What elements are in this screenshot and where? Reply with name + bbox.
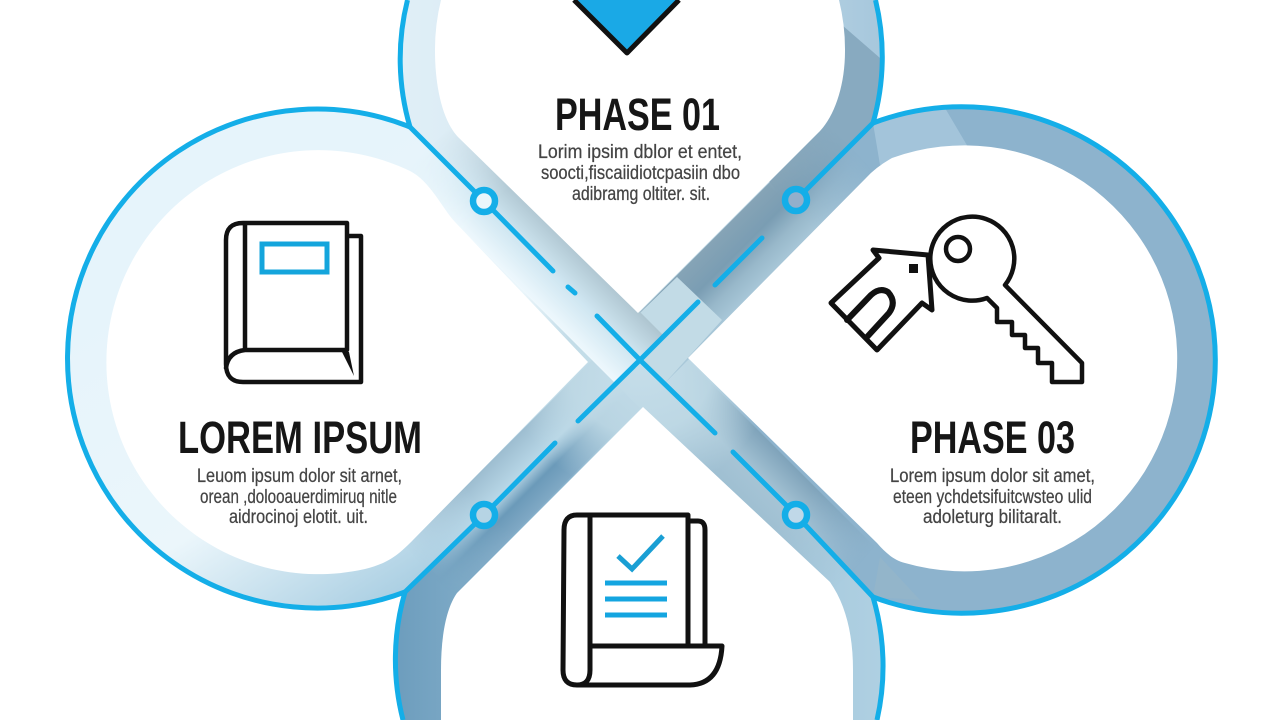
icon: shield tip (574, 0, 679, 53)
interior: left (106, 150, 588, 574)
diagonal band: lower left (422, 387, 596, 562)
body text: lorem ipsum: Leuom ipsum dolor sit arnet, (197, 466, 402, 487)
body text: phase 01: adibramg oltiter. sit. (572, 184, 710, 205)
interior: top (435, 0, 845, 313)
node: upper left (473, 190, 495, 212)
panel: phase 01 (538, 0, 742, 205)
node: lower right (785, 504, 807, 526)
outline: left lobe (68, 109, 410, 608)
body text: lorem ipsum (197, 466, 402, 528)
panel: phase 03 (831, 217, 1095, 528)
diagonal band: upper right (640, 172, 852, 382)
line: upper right (640, 123, 873, 360)
band: top lobe (400, 0, 882, 360)
diagonal band: upper left (446, 141, 662, 382)
line: upper left (410, 127, 640, 360)
dashed cross connector lines (405, 123, 873, 597)
body text: phase 01: Lorim ipsim dblor et entet, (538, 142, 742, 163)
body text: phase 03: Lorem ipsum dolor sit amet, (890, 466, 1095, 487)
band: left lobe (68, 109, 640, 608)
icon: book (226, 223, 361, 382)
interior: bottom (441, 407, 853, 720)
icon: scroll with checklist (563, 515, 722, 685)
panel: phase 04 scroll (563, 515, 722, 685)
heading: lorem ipsum: LOREM IPSUM (178, 412, 422, 463)
diagonal band: lower right (710, 401, 848, 548)
heading: phase 03: PHASE 03 (910, 412, 1075, 463)
band: bottom lobe (395, 360, 883, 720)
body text: phase 03: eteen ychdetsifuitcwsteo ulid (893, 487, 1092, 508)
line: lower left (405, 360, 640, 592)
band: right lobe lower section (873, 557, 920, 600)
centre glow (532, 282, 750, 470)
band: top lobe dark wedge (760, 25, 880, 208)
node: lower left (473, 504, 495, 526)
node: upper right (785, 189, 807, 211)
icon: key with house tag (831, 217, 1082, 382)
band: right lobe (640, 107, 1215, 613)
band: right lobe light section (873, 108, 968, 165)
body text: phase 01: soocti,fiscaiidiotcpasiin dbo (541, 163, 740, 184)
body text: phase 01 (538, 142, 742, 205)
body text: lorem ipsum: aidrocinoj elotit. uit. (229, 507, 368, 528)
diagonal band: centre patch (640, 277, 722, 382)
diagonal bands crossing (422, 141, 852, 562)
body text: phase 03: adoleturg bilitaralt. (923, 507, 1062, 528)
outline: right lobe (873, 107, 1215, 613)
outline: top lobe (400, 0, 882, 127)
panel: lorem ipsum (178, 223, 422, 528)
line: lower right (640, 360, 873, 597)
heading: phase 01: PHASE 01 (555, 89, 720, 140)
interior: right (688, 145, 1177, 571)
body text: lorem ipsum: orean ,dolooauerdimiruq nitle (200, 487, 397, 508)
outline: bottom lobe (395, 592, 883, 720)
body text: phase 03 (890, 466, 1095, 528)
